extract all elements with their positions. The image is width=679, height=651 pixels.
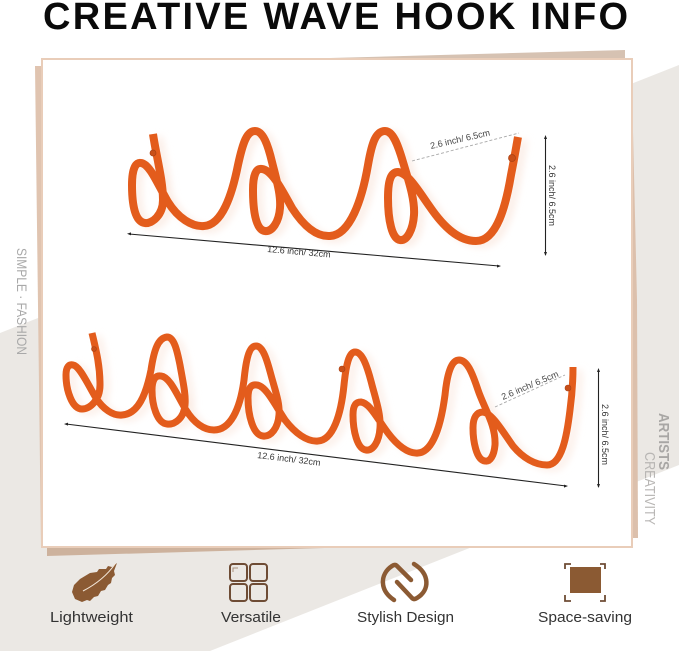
bottom hook dimensions: 2.6 inch/ 6.5cm — [500, 369, 560, 402]
label: versatile: Versatile — [221, 609, 281, 626]
top hook dimensions — [127, 127, 557, 268]
bottom hook, five-wave — [66, 333, 579, 468]
top hook dimensions: 2.6 inch/ 6.5cm — [429, 127, 491, 151]
side caption: artists: ARTISTS — [655, 413, 672, 470]
top hook dimensions: 12.6 inch/ 32cm — [267, 244, 331, 260]
offset tan backing frame — [35, 50, 638, 556]
icon: four squares — [230, 564, 267, 601]
icon: space-saving square — [565, 564, 605, 601]
bottom hook dimensions: 12.6 inch/ 32cm — [257, 450, 321, 468]
bottom hook dimensions — [64, 368, 610, 488]
top hook, three-wave — [132, 131, 524, 244]
side caption: creativity: CREATIVITY — [641, 452, 658, 525]
main white panel — [42, 59, 632, 547]
label: space-saving: Space-saving — [538, 609, 632, 626]
top hook dimensions: 2.6 inch/ 6.5cm — [547, 165, 557, 226]
icon: stylish design emblem — [383, 564, 426, 600]
icon: feather — [72, 563, 117, 602]
label: lightweight: Lightweight — [50, 609, 134, 626]
side caption: simple fashion: SIMPLE · FASHION — [14, 248, 30, 355]
bottom hook dimensions: 2.6 inch/ 6.5cm — [600, 404, 610, 465]
label: stylish design: Stylish Design — [357, 609, 454, 626]
